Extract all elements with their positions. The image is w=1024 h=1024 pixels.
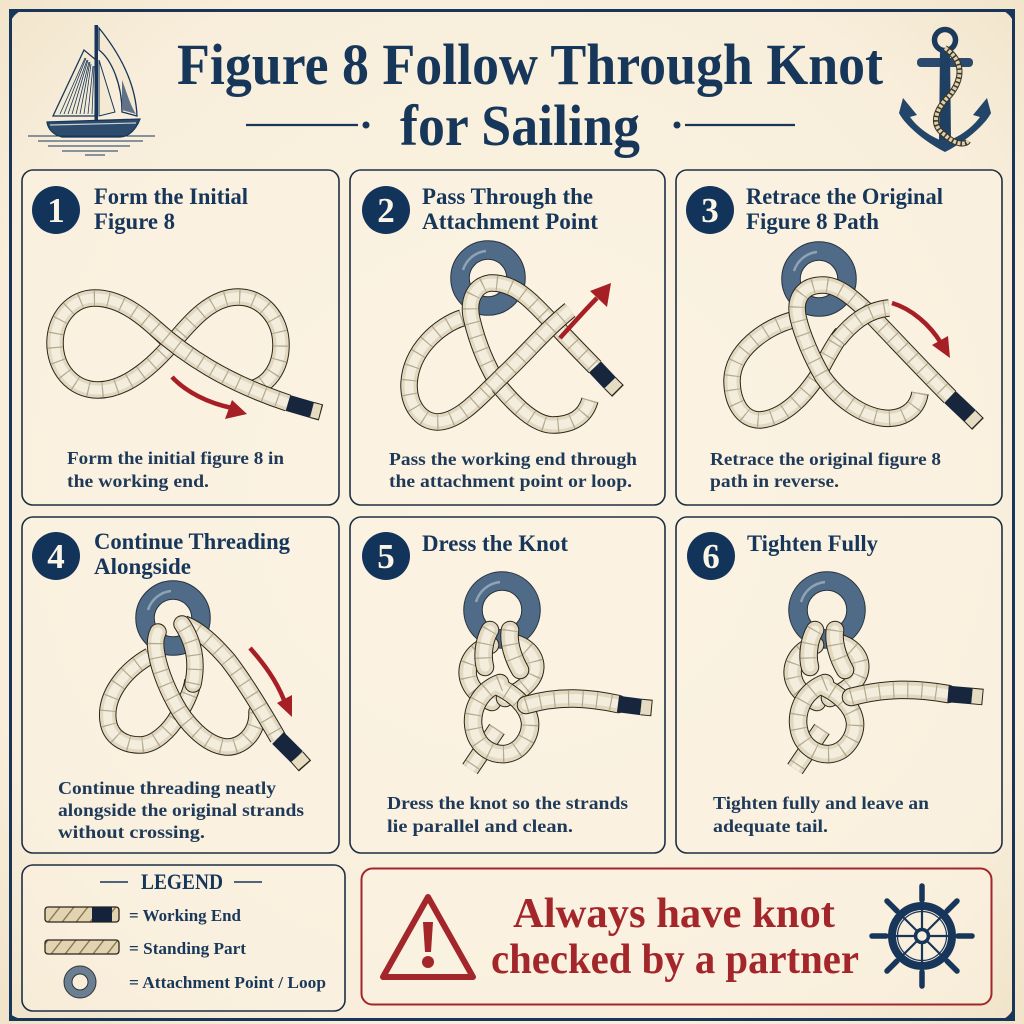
icon: sailboat [28, 25, 155, 155]
panel: legend [22, 865, 345, 1011]
legend: attachment point: = Attachment Point / Loop [129, 973, 326, 992]
rope: threading alongside [108, 624, 305, 766]
step number 4 [32, 532, 80, 580]
step number 5: 5 [377, 537, 395, 576]
step 5 heading: Dress the Knot [422, 531, 568, 556]
icon: ship wheel [872, 886, 972, 986]
legend: working end [45, 906, 241, 925]
step 2 heading [422, 184, 598, 234]
step 4 heading: Alongside [94, 554, 191, 579]
ring: attachment point [798, 581, 856, 639]
step 4 text: alongside the original strands [58, 800, 304, 820]
rope: through attachment point [409, 283, 618, 425]
step number 1 [32, 186, 80, 234]
title: Figure 8 Follow Through Knot [177, 32, 884, 97]
step 3 text: Retrace the original figure 8 [710, 449, 941, 469]
step 6 text [713, 793, 929, 836]
warning text: checked by a partner [491, 937, 859, 983]
step 4 text: without crossing. [58, 822, 205, 842]
rope: dressed knot [468, 630, 652, 769]
title [177, 32, 884, 158]
step number 3 [686, 186, 734, 234]
arrow: step 4 [250, 648, 292, 717]
step 2 heading: Attachment Point [422, 209, 598, 234]
panel: step 6 [676, 517, 1002, 853]
step 6 text: adequate tail. [713, 816, 828, 836]
step number 6 [687, 532, 735, 580]
panel: step 1 [22, 170, 339, 505]
step number 4: 4 [47, 537, 65, 576]
step 4 heading [94, 529, 290, 579]
icon: warning triangle [383, 897, 473, 977]
legend: working end: = Working End [129, 906, 241, 925]
legend heading: LEGEND [141, 869, 223, 894]
step 1 text: the working end. [67, 471, 209, 491]
step 2 text: the attachment point or loop. [389, 471, 632, 491]
legend: standing part: = Standing Part [129, 939, 247, 958]
step 2 text [389, 449, 637, 491]
panel: warning callout [362, 868, 992, 1004]
arrow: step 3 [892, 303, 950, 358]
step 5 text: lie parallel and clean. [387, 816, 573, 836]
title: for Sailing [400, 93, 640, 158]
step 1 heading: Form the Initial [94, 184, 248, 209]
step 4 heading: Continue Threading [94, 529, 290, 554]
step number 6: 6 [702, 537, 720, 576]
step 4 text [58, 778, 304, 842]
step 1 heading: Figure 8 [94, 209, 175, 234]
step 6 heading: Tighten Fully [747, 531, 878, 556]
panel: step 5 [350, 517, 665, 853]
legend: standing part [45, 939, 247, 958]
ring: attachment point [145, 590, 201, 646]
panel: step 4 [22, 517, 339, 853]
ring: attachment point [791, 251, 847, 307]
step number 1: 1 [47, 191, 65, 230]
step 6 text: Tighten fully and leave an [713, 793, 929, 813]
step 2 heading: Pass Through the [422, 184, 593, 209]
step number 2: 2 [377, 191, 395, 230]
rope: tightened knot [793, 630, 983, 769]
ring: attachment point [460, 250, 516, 306]
arrow: step 1 [172, 377, 247, 419]
rope: initial figure 8 [55, 297, 321, 412]
step 1 text: Form the initial figure 8 in [67, 448, 284, 468]
step 5 text [387, 793, 628, 836]
warning text: Always have knot [513, 891, 835, 937]
step 2 text: Pass the working end through [389, 449, 637, 469]
step number 3: 3 [701, 191, 719, 230]
ring: attachment point [473, 581, 531, 639]
panel: step 2 [350, 170, 665, 505]
step 3 heading: Figure 8 Path [746, 209, 879, 234]
step 1 text [67, 448, 284, 491]
step 3 heading: Retrace the Original [746, 184, 943, 209]
step number 5 [362, 532, 410, 580]
rope: retraced path [732, 285, 978, 424]
step number 2 [362, 186, 410, 234]
step 3 text [710, 449, 941, 491]
icon: anchor [899, 30, 991, 152]
legend: attachment point [68, 970, 326, 994]
step 5 text: Dress the knot so the strands [387, 793, 628, 813]
step 4 text: Continue threading neatly [58, 778, 276, 798]
panel: step 3 [676, 170, 1002, 505]
warning text [491, 891, 859, 983]
step 3 heading [746, 184, 943, 234]
arrow: step 2 [560, 283, 611, 338]
step 1 heading [94, 184, 248, 234]
step 3 text: path in reverse. [710, 471, 839, 491]
